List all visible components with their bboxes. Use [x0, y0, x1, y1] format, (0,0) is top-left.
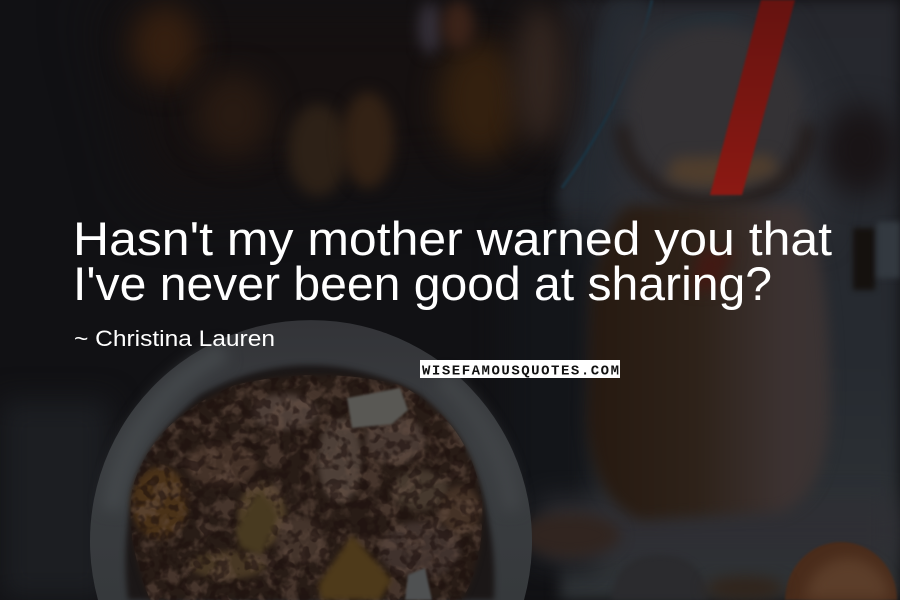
smoothie jar	[587, 0, 900, 520]
quote line 2: I've never been good at sharing?	[73, 257, 772, 310]
straw	[710, 0, 795, 195]
quote line 1: Hasn't my mother warned you that	[73, 212, 832, 265]
dark shape behind jar	[822, 106, 898, 194]
jar mouth	[627, 27, 803, 203]
granola clusters	[120, 360, 490, 600]
white bowl of granola	[90, 320, 532, 600]
cookie and spoon	[520, 513, 897, 600]
watermark: WiseFamousQuotes.com: WISEFAMOUSQUOTES.COM	[422, 364, 619, 380]
author attribution: ~ Christina Lauren	[74, 326, 275, 351]
jar body	[587, 205, 830, 520]
jar shoulder and lid haze	[650, 20, 740, 40]
quote text	[73, 212, 832, 310]
glass jar of nuts, top left	[100, 0, 652, 205]
